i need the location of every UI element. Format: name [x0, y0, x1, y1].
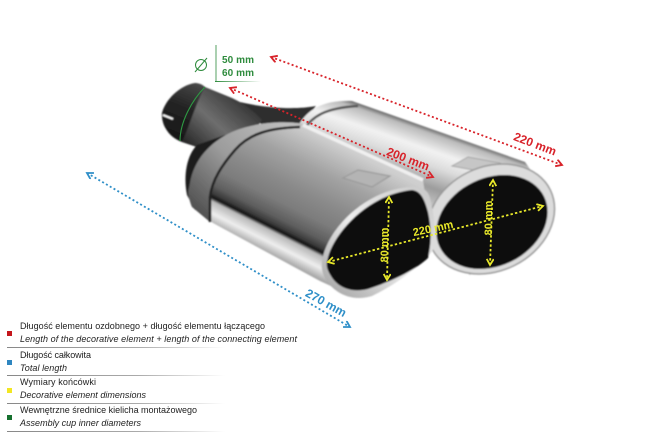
- legend item: red: Długość elementu ozdobnego + długość elementu łączącego: [20, 321, 265, 331]
- right tube body: [298, 101, 552, 275]
- right tube rim: [409, 143, 573, 295]
- legend item: yellow: [7, 377, 225, 404]
- exhaust tip product illustration: [162, 83, 573, 298]
- red arrow: 200 mm: [230, 88, 433, 177]
- left tube logo: [343, 170, 390, 187]
- band dark line: [210, 127, 300, 222]
- diameter callout: [195, 45, 261, 82]
- legend: [7, 321, 297, 432]
- blue arrow: 270 mm: [87, 173, 350, 327]
- right tube band: [302, 106, 358, 132]
- right tube: [298, 101, 573, 295]
- callout vertical rule: [215, 45, 217, 81]
- label text: yellow 220 mm: 220 mm: [412, 219, 455, 239]
- legend item: green: Assembly cup inner diameters: [19, 418, 142, 428]
- yellow arrow: right height 80 mm: [490, 180, 493, 265]
- dimension labels: [303, 129, 558, 320]
- inlet diameter marker: [180, 87, 205, 141]
- red arrow: 220 mm: [271, 57, 562, 165]
- left tube opening: [327, 190, 431, 290]
- right tube rim outline: [409, 143, 573, 295]
- label text: 220 mm: 220 mm: [512, 129, 558, 159]
- legend item: red: Length of the decorative element + length of the connecting element: [20, 334, 297, 344]
- legend item: blue: [7, 350, 225, 376]
- label text: 200 mm: 200 mm: [385, 144, 431, 174]
- inlet pipe: [162, 83, 215, 147]
- seam highlight: [303, 125, 423, 180]
- left tube rim: [322, 187, 434, 298]
- text: 50 mm: 50 mm: [222, 55, 254, 66]
- yellow arrow: width 220 mm: [328, 206, 543, 262]
- diameter symbol: [195, 58, 207, 72]
- text: 60 mm: 60 mm: [222, 68, 254, 79]
- label text: right 80 mm: 80 mm: [483, 200, 495, 235]
- label text: 270 mm: 270 mm: [303, 286, 349, 320]
- legend item: blue: Długość całkowita: [20, 350, 91, 360]
- Y connector right branch: [240, 102, 316, 127]
- right tube opening: [421, 157, 563, 287]
- callout horizontal rule: [215, 81, 261, 82]
- yellow arrow: left height 80 mm: [387, 197, 389, 280]
- left tube band: [189, 122, 303, 222]
- Y connector: [182, 87, 262, 168]
- legend item: blue: Total length: [20, 363, 67, 373]
- dark collar behind left tube: [185, 135, 230, 210]
- left tube body: [189, 122, 433, 298]
- legend item: yellow: Wymiary końcówki: [20, 377, 96, 387]
- right tube logo: [452, 157, 500, 172]
- legend item: green: Wewnętrzne średnice kielicha montażowego: [20, 405, 197, 415]
- pipe slot: [163, 115, 173, 119]
- legend item: green: [7, 405, 225, 432]
- left tube: [189, 122, 434, 298]
- legend item: red: [7, 321, 297, 348]
- label text: left 80 mm: 80 mm: [379, 227, 391, 262]
- legend item: yellow: Decorative element dimensions: [20, 390, 146, 400]
